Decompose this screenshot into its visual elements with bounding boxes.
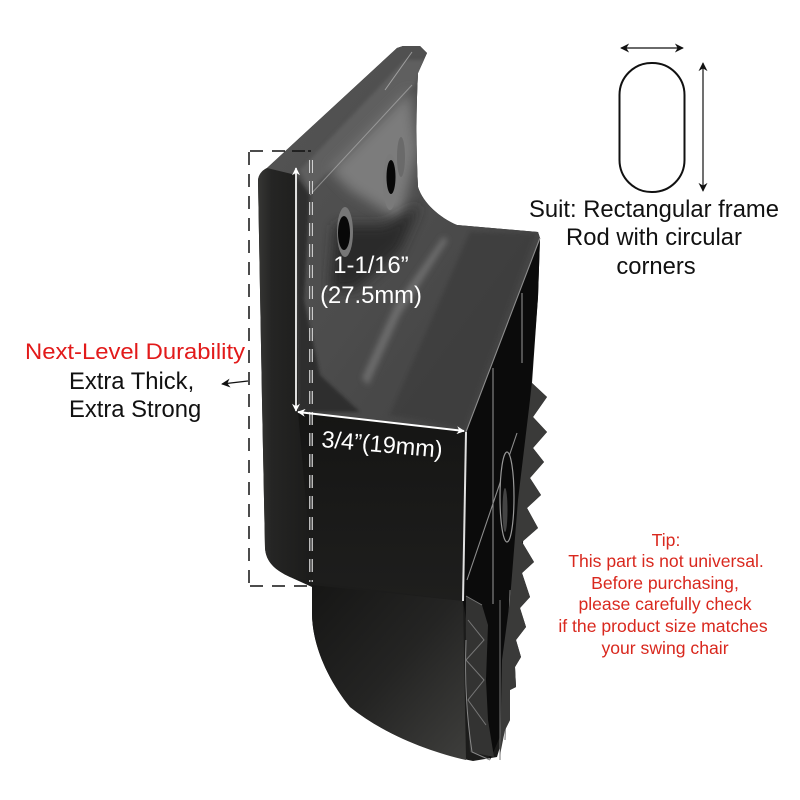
lower curved body [312, 585, 466, 760]
mounting hole 3 [397, 137, 405, 177]
flange shine line [310, 85, 412, 195]
icon: rounded rectangle rod profile [620, 48, 703, 192]
mounting hole 2 [383, 154, 397, 210]
dimension label: height: 1-1/16” [333, 252, 409, 279]
center oval slot [500, 452, 514, 542]
dashed outline: wall thickness box [249, 151, 312, 586]
ridge highlight [362, 237, 448, 385]
text: suitable frame description: Suit: Rectangular frame [529, 196, 779, 223]
right top surface [394, 234, 525, 418]
arrow: height dimension [295, 168, 297, 411]
text: suitable frame description: corners [616, 253, 696, 280]
rib lines [466, 238, 540, 604]
ribbed interior [463, 238, 547, 760]
text: purchase tip: Tip: [652, 530, 680, 550]
text: purchase tip: This part is not universal. [568, 551, 764, 571]
left plate [258, 168, 313, 582]
dimension label: height: (27.5mm) [320, 282, 422, 309]
tooth faces right [500, 383, 547, 755]
dimension label: width: 3/4”(19mm) [321, 426, 444, 463]
callout heading: Next-Level Durability [25, 339, 245, 364]
text: purchase tip: Before purchasing, [591, 573, 739, 593]
callout body: Extra Strong [69, 396, 201, 423]
dark shadow under hole [330, 205, 420, 290]
arrow: height [702, 63, 704, 191]
dark groove at plate edge [296, 175, 360, 412]
base silhouette [258, 46, 547, 761]
rim highlight [300, 60, 425, 190]
upper face with flange [260, 40, 550, 440]
light area [330, 90, 418, 220]
callout: durability [25, 339, 248, 423]
text: suitable frame description: Rod with circular [566, 224, 742, 251]
mounting hole 1 [337, 207, 353, 257]
arrow: callout pointer [222, 381, 248, 384]
text: purchase tip: your swing chair [601, 638, 729, 658]
arrow: width dimension [298, 412, 464, 431]
text: purchase tip: if the product size matches [558, 616, 768, 636]
arrow: width [621, 47, 683, 49]
front face [298, 412, 466, 601]
product photo: black swing chair foot cap [258, 40, 550, 761]
tooth faces left [466, 596, 494, 757]
text: purchase tip: please carefully check [578, 594, 752, 614]
callout body: Extra Thick, [69, 368, 194, 395]
